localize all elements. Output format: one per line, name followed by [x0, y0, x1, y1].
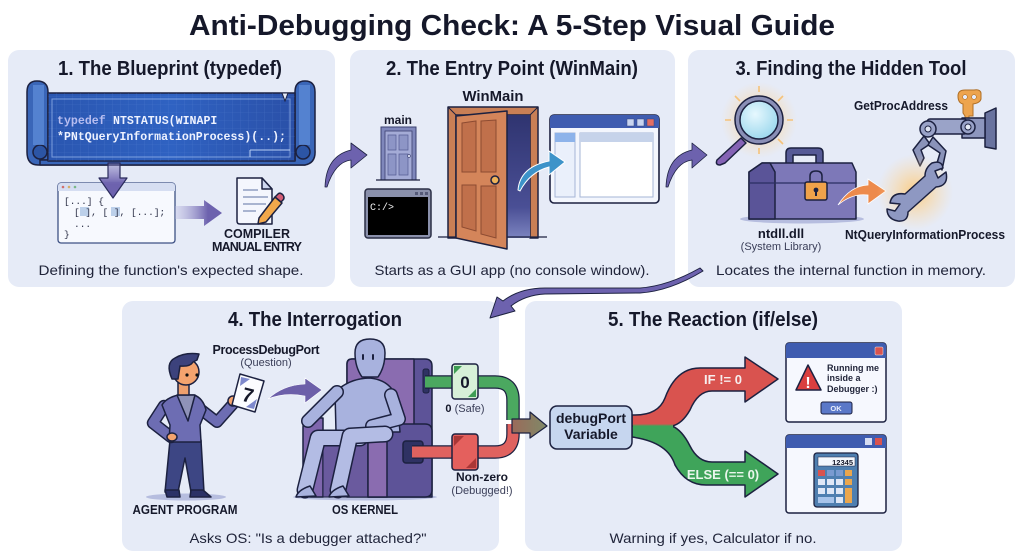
- label: processdebugport: ProcessDebugPort: [212, 343, 320, 357]
- pipe: green safe path: 0: [460, 373, 470, 392]
- caption: step 4: Asks OS: "Is a debugger attached?": [190, 530, 427, 546]
- dialog message: Debugger :): [827, 384, 878, 394]
- icon: question card 7: 7: [240, 384, 256, 408]
- arrow: step 1 to step 2: [325, 143, 367, 187]
- icon: magnifying glass: [716, 82, 797, 165]
- arrow: red if branch: [632, 357, 778, 426]
- arrow: green else branch: [632, 426, 778, 497]
- box: debugport variable: debugPort: [556, 410, 626, 426]
- arrow: blueprint down to window: [99, 163, 127, 198]
- label: processdebugport: (Question): [240, 357, 292, 369]
- pipe: green safe path: [425, 364, 513, 420]
- arrow: step 2 to step 3: [666, 143, 707, 187]
- struct window: [...] {: [64, 196, 104, 207]
- struct window: ...: [74, 219, 91, 230]
- heading: step 2: 2. The Entry Point (WinMain): [386, 58, 638, 80]
- band where branches blend: [633, 418, 673, 432]
- icon: document with pencil: [237, 178, 284, 224]
- label: winmain: WinMain: [462, 89, 524, 105]
- caption: step 1: Defining the function's expected shape.: [38, 262, 304, 278]
- label: main: main: [384, 113, 412, 127]
- heading: step 3: 3. Finding the Hidden Tool: [736, 58, 966, 80]
- icon: gui window: [550, 115, 659, 203]
- title: Anti-Debugging Check: A 5-Step Visual Guide: [189, 10, 835, 42]
- warning dialog: !: [805, 375, 811, 392]
- icon: console window: C:/>: [370, 202, 394, 214]
- box: debugport variable: Variable: [564, 426, 618, 442]
- label: os kernel: OS KERNEL: [332, 503, 398, 517]
- blueprint scroll: *PNtQueryInformationProcess)(..);: [57, 131, 286, 144]
- arrow: step 3 down to step 4: [490, 268, 703, 318]
- icon: large open door: [438, 107, 547, 249]
- struct window: }: [64, 229, 70, 240]
- panel: 1 the blueprint: [8, 50, 335, 287]
- dialog message: inside a: [827, 373, 862, 383]
- heading: step 4: 4. The Interrogation: [228, 309, 402, 331]
- caption: step 3: Locates the internal function in memory.: [716, 262, 986, 278]
- icon: question card 7: [232, 374, 264, 412]
- label: compiler manual entry: MANUAL ENTRY: [212, 240, 303, 254]
- icon: agent person: [146, 354, 238, 500]
- panel: 5 the reaction: [512, 301, 902, 551]
- heading: step 5: 5. The Reaction (if/else): [608, 309, 818, 331]
- heading: step 1: 1. The Blueprint (typedef): [58, 58, 282, 80]
- icon: console window: [365, 189, 431, 238]
- panel: 4 the interrogation: [122, 301, 513, 551]
- label: else branch: ELSE (== 0): [687, 467, 759, 482]
- label: agent program: AGENT PROGRAM: [132, 503, 238, 517]
- arrow: door to window: [518, 151, 565, 191]
- label: if branch: IF != 0: [704, 372, 742, 387]
- warning dialog: OK: [830, 404, 842, 413]
- label: non-zero debugged: (Debugged!): [451, 485, 513, 497]
- icon: calculator: 12345: [832, 458, 853, 467]
- caption: step 2: Starts as a GUI app (no console window).: [374, 262, 650, 278]
- struct window: [ ], [ ], [...];: [74, 207, 165, 218]
- arrow: window to compiler entry: [175, 200, 222, 226]
- icon: robotic arm: [913, 108, 996, 170]
- panel: 3 finding the hidden tool: [688, 50, 1015, 287]
- pipe: red debugged path: [412, 424, 513, 470]
- arrow: merged result to variable: [512, 412, 547, 438]
- code text: typedef: [57, 115, 106, 128]
- caption: step 5: Warning if yes, Calculator if no.: [610, 530, 816, 546]
- icon: key: [958, 90, 981, 120]
- dialog message: Running me: [827, 363, 879, 373]
- struct window: [58, 183, 175, 243]
- label: ntquery function: NtQueryInformationProcess: [845, 227, 1005, 242]
- box: debugport variable: [550, 406, 632, 449]
- arrow: toolbox to wrench: [838, 179, 886, 205]
- icon: locked toolbox: [740, 148, 864, 224]
- code text: NTSTATUS(WINAPI: [113, 115, 217, 128]
- ok button: [821, 402, 852, 414]
- warning dialog: [786, 343, 886, 422]
- blueprint scroll: [27, 81, 315, 165]
- label: getprocaddress: GetProcAddress: [854, 98, 948, 113]
- icon: os kernel on throne: [293, 339, 437, 500]
- calculator window: [786, 435, 886, 513]
- panel: 2 the entry point: [350, 50, 675, 287]
- label: ntdll: (System Library): [741, 241, 821, 253]
- arrow: question to kernel: [268, 378, 322, 403]
- icon: warning triangle: [796, 365, 821, 390]
- icon: glowing wrench: [877, 154, 953, 230]
- label: ntdll: ntdll.dll: [758, 226, 804, 241]
- label: compiler manual entry: COMPILER: [224, 227, 290, 241]
- label: non-zero debugged: Non-zero: [456, 470, 508, 484]
- label: 0 safe: 0 (Safe): [445, 403, 485, 415]
- icon: small door: [376, 127, 420, 180]
